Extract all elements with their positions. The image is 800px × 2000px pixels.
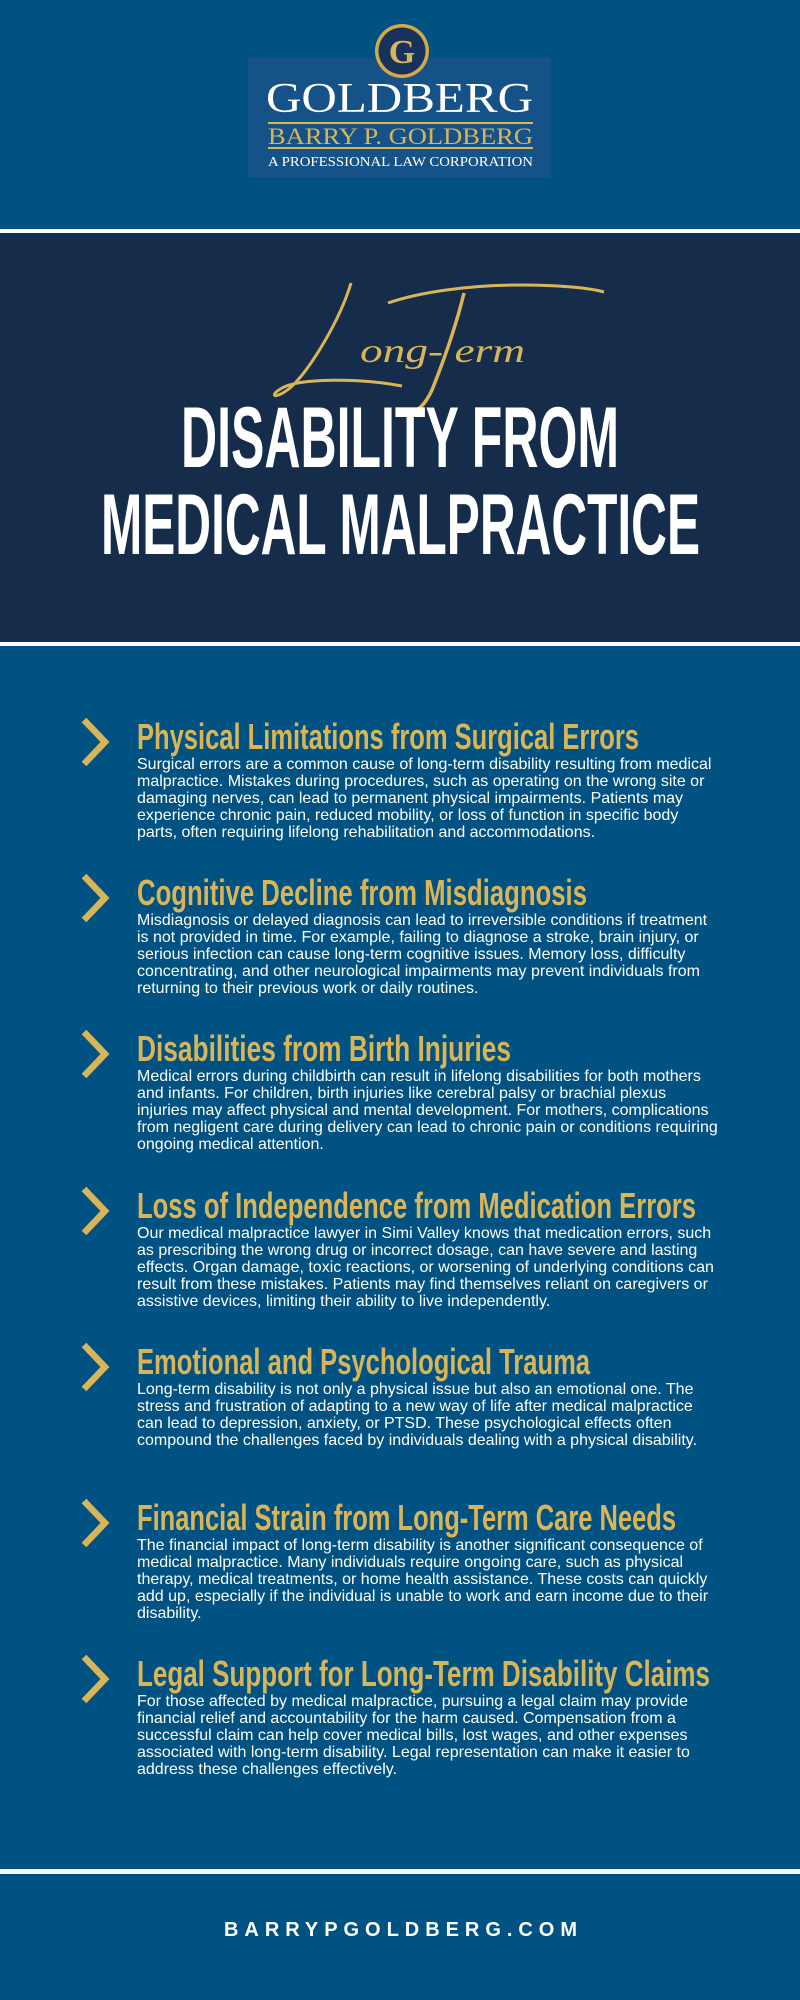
body 1: malpractice. Mistakes during procedures, such as operating on the wrong site or bbox=[137, 773, 704, 790]
icon: chevron bbox=[82, 1655, 110, 1703]
icon: chevron bbox=[82, 718, 110, 766]
logo: GOLDBERG bbox=[266, 76, 533, 122]
logo: G bbox=[389, 34, 415, 71]
body 4: result from these mistakes. Patients may find themselves reliant on caregivers or bbox=[137, 1276, 708, 1293]
body 5: can lead to depression, anxiety, or PTSD. These psychological effects often bbox=[137, 1415, 672, 1432]
body 1: damaging nerves, can lead to permanent physical impairments. Patients may bbox=[137, 790, 683, 807]
body 7: address these challenges effectively. bbox=[137, 1761, 397, 1778]
logo: A PROFESSIONAL LAW CORPORATION bbox=[268, 154, 533, 169]
heading 3: Disabilities from Birth Injuries bbox=[137, 1028, 511, 1069]
body 3: Medical errors during childbirth can result in lifelong disabilities for both mothers bbox=[137, 1068, 701, 1085]
logo: BARRY P. GOLDBERG bbox=[268, 124, 533, 149]
body 3: ongoing medical attention. bbox=[137, 1136, 324, 1153]
icon: chevron bbox=[82, 1499, 110, 1547]
body 4: Our medical malpractice lawyer in Simi Valley knows that medication errors, such bbox=[137, 1225, 711, 1242]
body 7 bbox=[137, 1693, 690, 1778]
body 3: and infants. For children, birth injuries like cerebral palsy or brachial plexus bbox=[137, 1085, 666, 1102]
body 4: effects. Organ damage, toxic reactions, or worsening of underlying conditions can bbox=[137, 1259, 714, 1276]
body 4 bbox=[137, 1225, 714, 1310]
body 4: as prescribing the wrong drug or incorrect dosage, can have severe and lasting bbox=[137, 1242, 697, 1259]
body 3 bbox=[137, 1068, 718, 1153]
section 1 bbox=[82, 716, 711, 841]
body 1: Surgical errors are a common cause of long-term disability resulting from medical bbox=[137, 756, 711, 773]
section 7 bbox=[82, 1653, 710, 1778]
body 2: returning to their previous work or daily routines. bbox=[137, 980, 478, 997]
body 2: Misdiagnosis or delayed diagnosis can lead to irreversible conditions if treatment bbox=[137, 912, 707, 929]
body 5: Long-term disability is not only a physical issue but also an emotional one. The bbox=[137, 1381, 693, 1398]
body 2: is not provided in time. For example, failing to diagnose a stroke, brain injury, or bbox=[137, 929, 699, 946]
icon: chevron bbox=[82, 1187, 110, 1235]
body 6: therapy, medical treatments, or home health assistance. These costs can quickly bbox=[137, 1571, 707, 1588]
icon: chevron bbox=[82, 1343, 110, 1391]
script subtitle: Long-Term bbox=[0, 0, 604, 410]
heading 2: Cognitive Decline from Misdiagnosis bbox=[137, 872, 587, 913]
body 5: compound the challenges faced by individuals dealing with a physical disability. bbox=[137, 1432, 697, 1449]
body 1: experience chronic pain, reduced mobility, or loss of function in specific body bbox=[137, 807, 678, 824]
body 2: concentrating, and other neurological impairments may prevent individuals from bbox=[137, 963, 700, 980]
icon: chevron bbox=[82, 1030, 110, 1078]
script subtitle: Long-Term: ong- erm bbox=[360, 333, 525, 370]
body 5 bbox=[137, 1381, 697, 1449]
body 6: add up, especially if the individual is unable to work and earn income due to their bbox=[137, 1588, 708, 1605]
heading 5: Emotional and Psychological Trauma bbox=[137, 1341, 591, 1382]
section 3 bbox=[82, 1028, 718, 1153]
body 3: injuries may affect physical and mental development. For mothers, complications bbox=[137, 1102, 709, 1119]
body 6: medical malpractice. Many individuals require ongoing care, such as physical bbox=[137, 1554, 683, 1571]
section 2 bbox=[82, 872, 707, 997]
body 2 bbox=[137, 912, 707, 997]
body 6: disability. bbox=[137, 1605, 202, 1622]
body 3: from negligent care during delivery can lead to chronic pain or conditions requiring bbox=[137, 1119, 718, 1136]
body 2: serious infection can cause long-term cognitive issues. Memory loss, difficulty bbox=[137, 946, 685, 963]
body 6 bbox=[137, 1537, 708, 1622]
body 7: associated with long-term disability. Legal representation can make it easier to bbox=[137, 1744, 690, 1761]
body 7: financial relief and accountability for the harm caused. Compensation from a bbox=[137, 1710, 676, 1727]
logo bbox=[248, 24, 551, 177]
body 7: For those affected by medical malpractice, pursuing a legal claim may provide bbox=[137, 1693, 688, 1710]
body 5: stress and frustration of adapting to a new way of life after medical malpractice bbox=[137, 1398, 693, 1415]
section 4 bbox=[82, 1185, 714, 1310]
footer: website: BARRYPGOLDBERG.COM bbox=[224, 1919, 577, 1941]
icon: chevron bbox=[82, 874, 110, 922]
body 4: assistive devices, limiting their ability to live independently. bbox=[137, 1293, 550, 1310]
title panel bbox=[0, 233, 800, 642]
body 6: The financial impact of long-term disability is another significant consequence of bbox=[137, 1537, 703, 1554]
header band with logo bbox=[0, 0, 800, 229]
body 7: successful claim can help cover medical bills, lost wages, and other expenses bbox=[137, 1727, 688, 1744]
body 1: parts, often requiring lifelong rehabilitation and accommodations. bbox=[137, 824, 595, 841]
body 1 bbox=[137, 756, 711, 841]
section 6 bbox=[82, 1497, 708, 1622]
section 5 bbox=[82, 1341, 697, 1449]
